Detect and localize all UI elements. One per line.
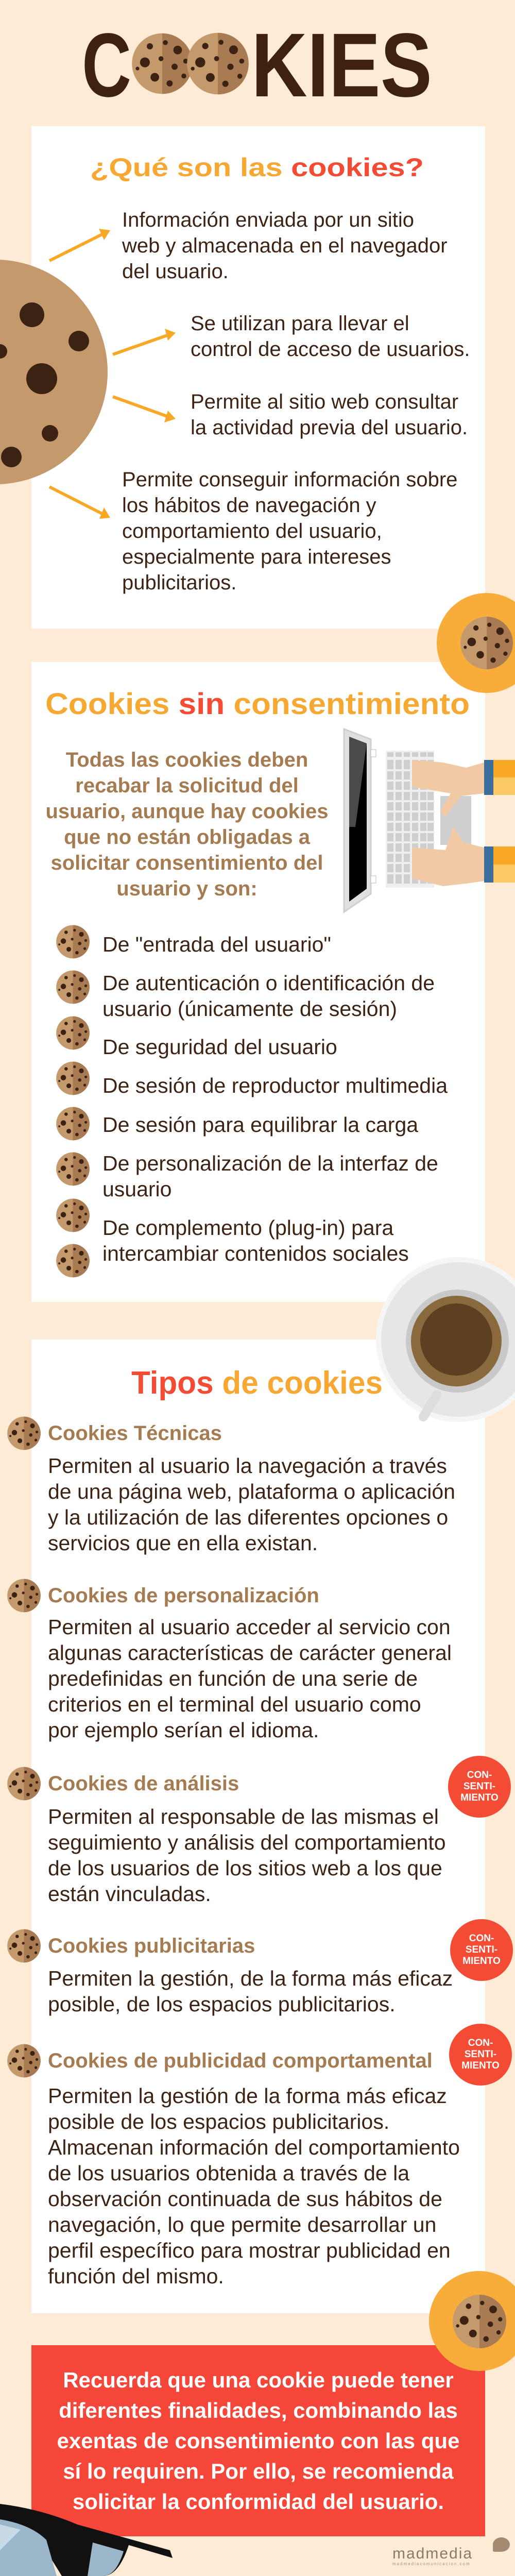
text: item 4: publicitarios. <box>122 571 236 594</box>
text: Permiten al usuario la navegación a través <box>48 1454 447 1478</box>
text: item 2: control de acceso de usuarios. <box>191 338 470 361</box>
text: item 4: Permite conseguir información sobre <box>122 468 457 491</box>
badge: consentimiento 3 <box>449 2024 512 2086</box>
badge: consentimiento 2: CON- <box>469 1933 494 1944</box>
list: cookie bullets <box>56 925 90 1278</box>
text: item 3 <box>191 391 468 439</box>
text: observación continuada de sus hábitos de <box>48 2187 442 2211</box>
text: por ejemplo serían el idioma. <box>48 1718 319 1742</box>
list item 2 <box>102 971 435 1021</box>
badge: consentimiento 1: MIENTO <box>460 1792 499 1803</box>
panel: sin consentimiento <box>31 662 485 1302</box>
panel: que son <box>31 126 485 629</box>
list item 6: usuario <box>102 1177 171 1201</box>
text: Cookies Técnicas <box>48 1422 222 1445</box>
text: Permiten al responsable de las mismas el <box>48 1805 439 1828</box>
icon: laptop with hands <box>343 728 515 913</box>
text: algunas características de carácter general <box>48 1641 452 1665</box>
icon: glasses <box>0 2504 173 2576</box>
text: intro: que no están obligadas a <box>64 826 310 849</box>
badge: consentimiento 2: MIENTO <box>462 1956 501 1967</box>
text: item 1: Información enviada por un sitio <box>122 209 414 231</box>
text: item 1: del usuario. <box>122 260 229 283</box>
list item 2: usuario (únicamente de sesión) <box>102 997 397 1021</box>
text: de una página web, plataforma o aplicación <box>48 1480 455 1503</box>
callout: recuerda: exentas de consentimiento con las que <box>57 2429 459 2453</box>
text: intro: usuario, aunque hay cookies <box>45 800 329 823</box>
text: Permiten al usuario acceder al servicio con <box>48 1615 451 1639</box>
text: seguimiento y análisis del comportamiento <box>48 1831 446 1854</box>
badge: consentimiento 3: CON- <box>468 2038 493 2048</box>
arrows <box>48 229 176 519</box>
callout: recuerda: solicitar la conformidad del usuario. <box>73 2489 444 2514</box>
badge: consentimiento 2 <box>450 1919 513 1981</box>
list item 7 <box>102 1216 409 1265</box>
text: item 4: los hábitos de navegación y <box>122 494 376 517</box>
section: tecnicas <box>48 1422 455 1555</box>
logo: madmedia <box>392 2537 510 2566</box>
big cookie <box>0 260 108 484</box>
text: perfil específico para mostrar publicidad en <box>48 2239 451 2262</box>
section: analisis <box>48 1772 446 1906</box>
text: de los usuarios obtenida a través de la <box>48 2161 409 2185</box>
text: item 2: Se utilizan para llevar el <box>191 312 409 335</box>
list item 3: De seguridad del usuario <box>102 1035 337 1059</box>
text: intro: Todas las cookies deben <box>66 749 308 771</box>
list item 1: De "entrada del usuario" <box>102 933 331 956</box>
text: Almacenan información del comportamiento <box>48 2136 460 2159</box>
text: item 3: la actividad previa del usuario. <box>191 416 468 439</box>
text: intro: usuario y son: <box>116 877 258 900</box>
text: Cookies de personalización <box>48 1584 319 1607</box>
text: función del mismo. <box>48 2264 224 2288</box>
icon: coffee cup <box>376 1257 515 1422</box>
title <box>82 21 432 108</box>
callout: recuerda: Recuerda que una cookie puede tener <box>63 2368 454 2392</box>
heading: sin consentimiento: Cookies sin consentimiento <box>45 687 470 721</box>
text: Permiten la gestión de la forma más eficaz <box>48 2084 447 2108</box>
section: comportamental <box>48 2049 460 2288</box>
text: item 4 <box>122 468 457 594</box>
text: item 2 <box>191 312 470 361</box>
list item 6 <box>102 1151 438 1201</box>
badge: consentimiento 2: SENTI- <box>466 1944 497 1955</box>
text: criterios en el terminal del usuario como <box>48 1692 421 1716</box>
text: item 4: especialmente para intereses <box>122 546 391 568</box>
text: posible, de los espacios publicitarios. <box>48 1992 396 2016</box>
callout: recuerda: sí lo requiren. Por ello, se recomienda <box>63 2459 454 2483</box>
icon: orange cookie badge 2 <box>429 2271 515 2371</box>
text: intro: recabar la solicitud del <box>75 774 299 797</box>
text: item 3: Permite al sitio web consultar <box>191 391 458 413</box>
callout: recuerda <box>31 2345 485 2536</box>
badge: consentimiento 1: SENTI- <box>464 1781 495 1792</box>
list item 7: De complemento (plug-in) para <box>102 1216 393 1240</box>
heading: que son: ¿Qué son las cookies? <box>90 153 424 182</box>
section: personalizacion <box>48 1584 452 1742</box>
list item 4: De sesión de reproductor multimedia <box>102 1074 448 1097</box>
text: item 4: comportamiento del usuario, <box>122 520 382 543</box>
text: intro: solicitar consentimiento del <box>50 852 323 874</box>
badge: consentimiento 3: MIENTO <box>461 2060 500 2071</box>
text: Cookies publicitarias <box>48 1935 255 1957</box>
text: de los usuarios de los sitios web a los que <box>48 1856 442 1880</box>
icon: orange cookie badge 1 <box>437 593 515 693</box>
text: Cookies de publicidad comportamental <box>48 2049 433 2072</box>
text: item 1: web y almacenada en el navegador <box>122 234 448 257</box>
text: Permiten la gestión, de la forma más eficaz <box>48 1967 453 1990</box>
text: posible de los espacios publicitarios. <box>48 2110 389 2133</box>
badge: consentimiento 1: CON- <box>467 1770 492 1781</box>
list item 7: intercambiar contenidos sociales <box>102 1242 409 1265</box>
heading: tipos: Tipos de cookies <box>131 1365 383 1401</box>
text: servicios que en ella existan. <box>48 1531 318 1555</box>
logo: madmedia: madmediacomunicacion.com <box>392 2562 471 2566</box>
text: están vinculadas. <box>48 1882 211 1906</box>
badge: consentimiento 3: SENTI- <box>465 2049 496 2060</box>
panel: tipos <box>31 1340 485 2313</box>
list item 6: De personalización de la interfaz de <box>102 1151 438 1175</box>
section: publicitarias <box>48 1935 453 2016</box>
text: intro <box>45 749 329 900</box>
text: item 1 <box>122 209 448 283</box>
text: y la utilización de las diferentes opciones o <box>48 1505 448 1529</box>
list item 5: De sesión para equilibrar la carga <box>102 1113 418 1137</box>
callout: recuerda: diferentes finalidades, combinando las <box>59 2398 458 2422</box>
logo: madmedia: madmedia <box>392 2545 473 2562</box>
text: Cookies de análisis <box>48 1772 239 1795</box>
list item 2: De autenticación o identificación de <box>102 971 435 995</box>
text: navegación, lo que permite desarrollar un <box>48 2213 436 2236</box>
section icons <box>7 1417 41 2077</box>
badge: consentimiento 1 <box>448 1756 511 1818</box>
text: predefinidas en función de una serie de <box>48 1667 418 1690</box>
